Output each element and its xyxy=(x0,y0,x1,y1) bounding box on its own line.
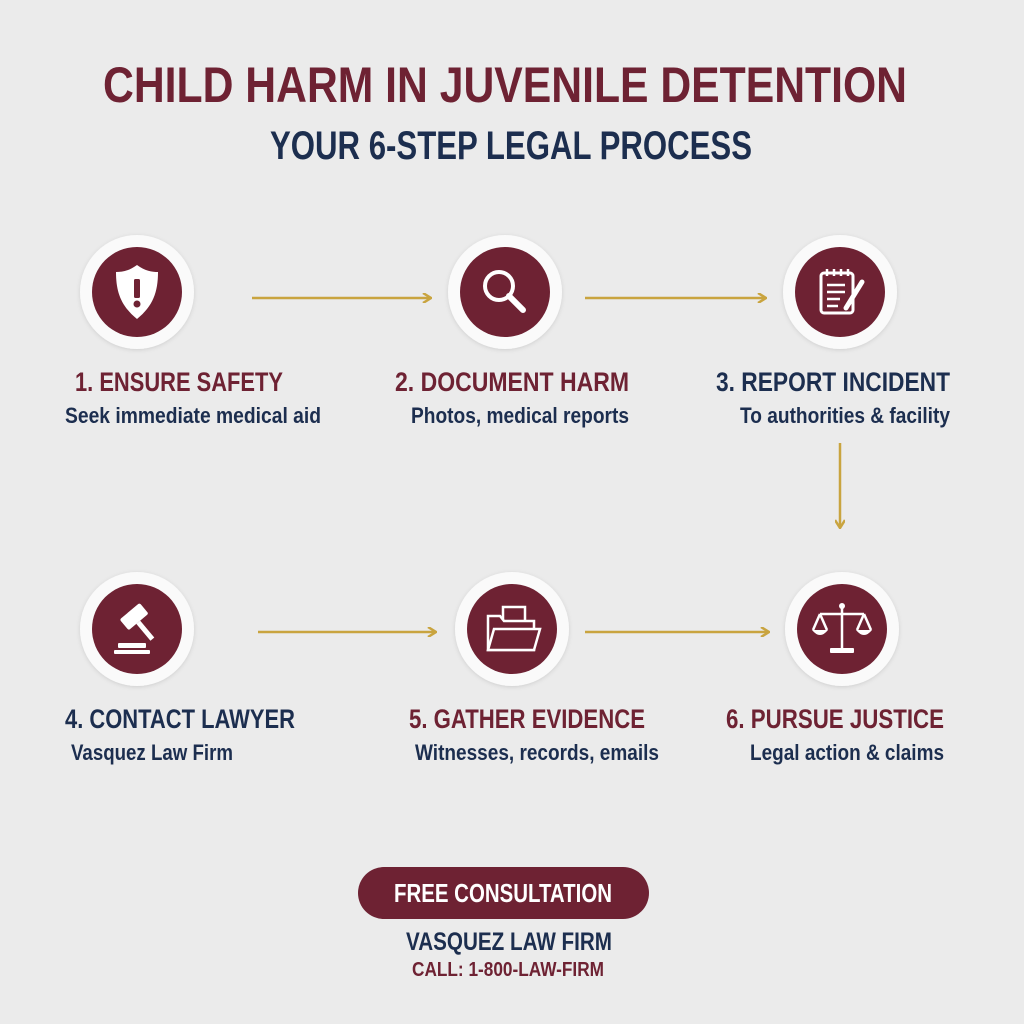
step 5 xyxy=(409,572,659,765)
arrow 3-6 xyxy=(839,443,841,527)
step 3 title: 3. REPORT INCIDENT xyxy=(716,367,950,397)
step 6 text: Legal action & claims xyxy=(750,740,944,765)
icon: folder xyxy=(455,572,569,686)
step 5 title: 5. GATHER EVIDENCE xyxy=(409,704,645,734)
step 3 text: To authorities & facility xyxy=(740,403,951,428)
icon: scales xyxy=(785,572,899,686)
phone: CALL: 1-800-LAW-FIRM xyxy=(412,959,604,981)
firm name: VASQUEZ LAW FIRM xyxy=(406,928,612,956)
step 6 xyxy=(726,572,944,765)
arrow 4-5 xyxy=(258,631,435,633)
arrow 5-6 xyxy=(585,631,768,633)
step 4 title: 4. CONTACT LAWYER xyxy=(65,704,295,734)
step 6 title: 6. PURSUE JUSTICE xyxy=(726,704,944,734)
step 2 title: 2. DOCUMENT HARM xyxy=(395,367,629,397)
cta button: FREE CONSULTATION xyxy=(394,878,612,908)
cta button xyxy=(358,867,649,919)
step 5 text: Witnesses, records, emails xyxy=(415,740,659,765)
icon: gavel xyxy=(80,572,194,686)
step 2 xyxy=(395,235,629,428)
icon: magnifier xyxy=(448,235,562,349)
step 1 text: Seek immediate medical aid xyxy=(65,403,321,428)
arrow 2-3 xyxy=(585,297,765,299)
step 1 title: 1. ENSURE SAFETY xyxy=(75,367,283,397)
step 2 text: Photos, medical reports xyxy=(411,403,629,428)
title: CHILD HARM IN JUVENILE DETENTION xyxy=(103,57,907,113)
step 4 text: Vasquez Law Firm xyxy=(71,740,233,765)
icon: notepad xyxy=(783,235,897,349)
arrow 1-2 xyxy=(252,297,430,299)
icon: shield xyxy=(80,235,194,349)
step 1 xyxy=(65,235,321,428)
step 4 xyxy=(65,572,295,765)
subtitle: YOUR 6-STEP LEGAL PROCESS xyxy=(270,124,752,168)
step 3 xyxy=(716,235,951,428)
